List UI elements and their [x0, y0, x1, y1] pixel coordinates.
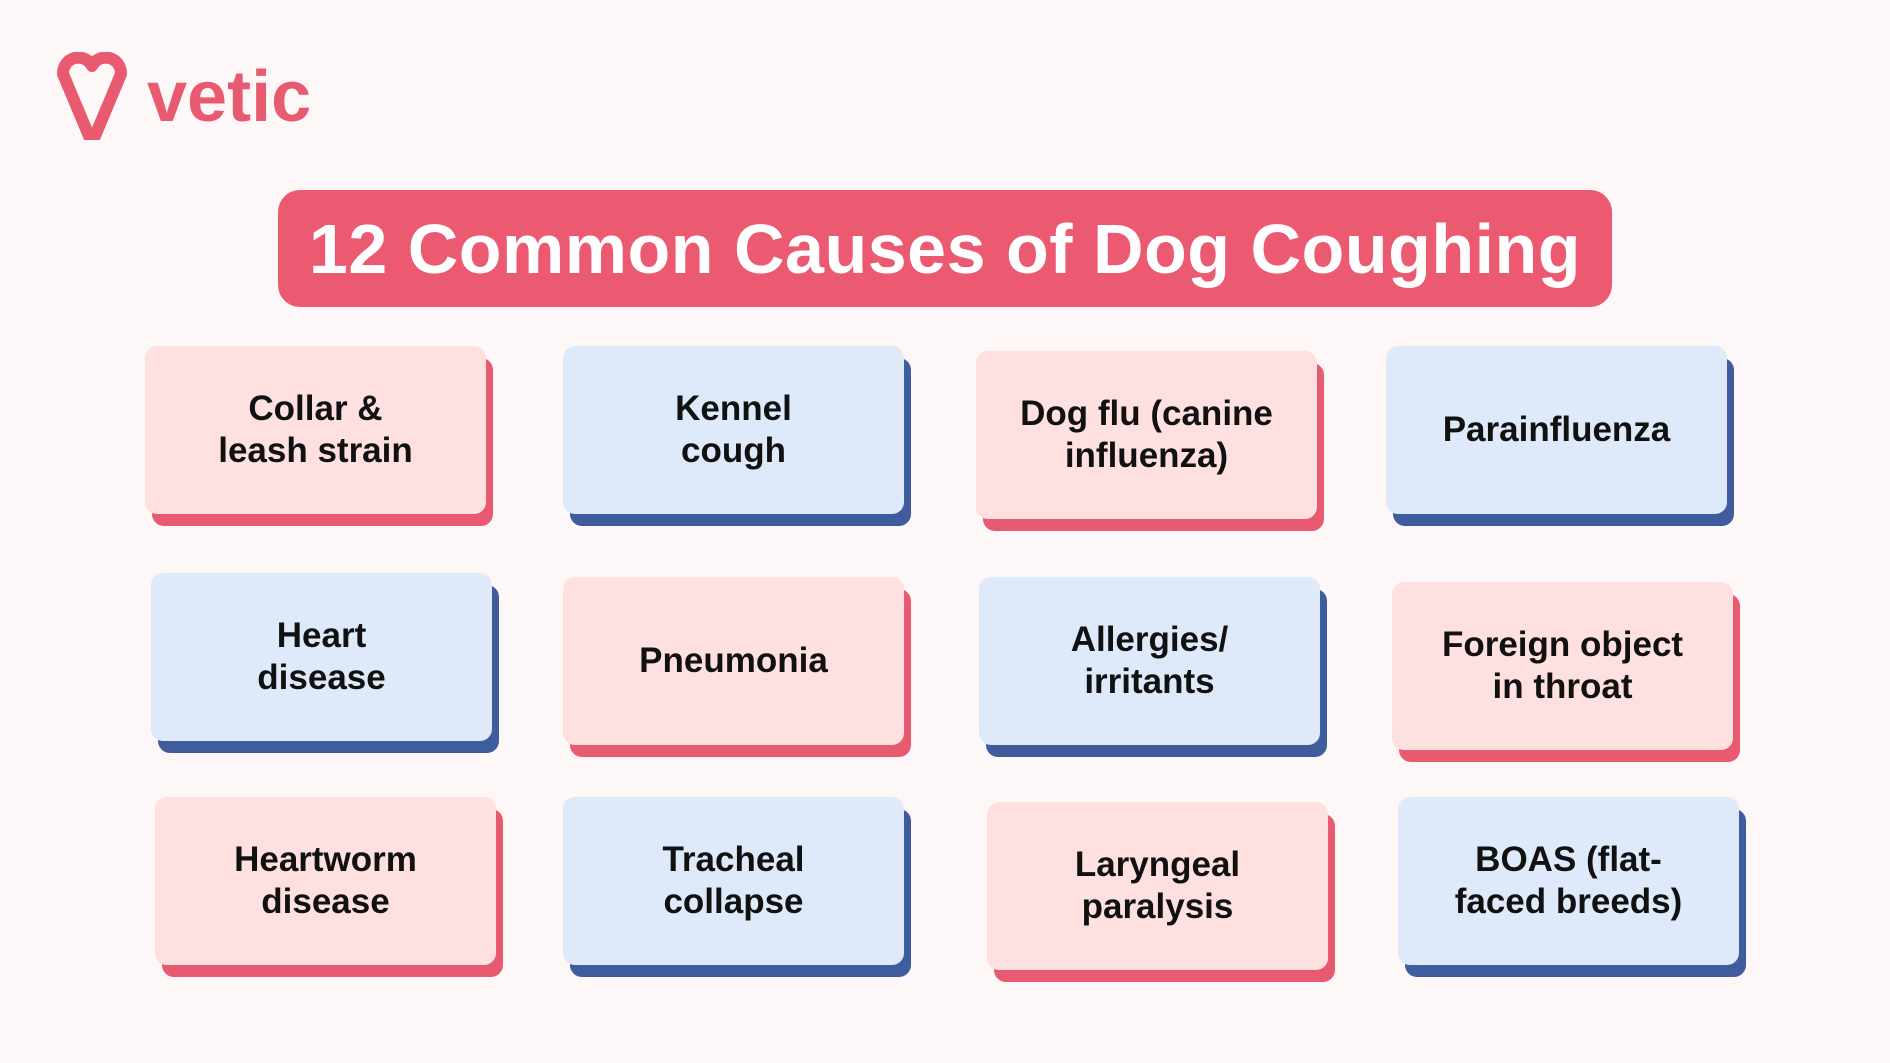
card: pneumonia: Pneumonia	[639, 641, 828, 680]
card: laryngeal paralysis: Laryngeal	[1075, 845, 1240, 884]
icon: heart V	[57, 52, 127, 140]
card: collar: Collar &	[248, 389, 383, 428]
card: parainfluenza: Parainfluenza	[1443, 410, 1670, 449]
card: collar	[145, 346, 486, 514]
card: heartworm: Heartworm	[234, 840, 417, 879]
card: heartworm	[155, 797, 496, 965]
card: heartworm: disease	[261, 882, 390, 921]
card: foreign object	[1392, 582, 1733, 750]
logo	[57, 52, 311, 140]
card: laryngeal paralysis	[987, 802, 1328, 970]
card: parainfluenza	[1386, 346, 1727, 514]
card: dog flu: influenza)	[1065, 436, 1228, 475]
card: heart disease: Heart	[277, 616, 366, 655]
card: kennel cough	[563, 346, 904, 514]
card: dog flu: Dog flu (canine	[1020, 394, 1273, 433]
card: collar: leash strain	[218, 431, 413, 470]
card: pneumonia	[563, 577, 904, 745]
title	[278, 190, 1612, 307]
card: BOAS	[1398, 797, 1739, 965]
card: laryngeal paralysis: paralysis	[1082, 887, 1233, 926]
card: heart disease: disease	[257, 658, 386, 697]
card: dog flu	[976, 351, 1317, 519]
card: heart disease	[151, 573, 492, 741]
card: BOAS: faced breeds)	[1455, 882, 1682, 921]
card: kennel cough: cough	[681, 431, 786, 470]
card: tracheal collapse	[563, 797, 904, 965]
card: allergies: irritants	[1084, 662, 1215, 701]
card: allergies	[979, 577, 1320, 745]
card: foreign object: in throat	[1492, 667, 1632, 706]
card: tracheal collapse: Tracheal	[662, 840, 805, 879]
brand name: vetic	[147, 57, 311, 137]
card: kennel cough: Kennel	[675, 389, 792, 428]
card: allergies: Allergies/	[1071, 620, 1228, 659]
card: BOAS: BOAS (flat-	[1475, 840, 1662, 879]
title: 12 Common Causes of Dog Coughing	[309, 210, 1581, 288]
card: tracheal collapse: collapse	[663, 882, 804, 921]
card: foreign object: Foreign object	[1442, 625, 1683, 664]
